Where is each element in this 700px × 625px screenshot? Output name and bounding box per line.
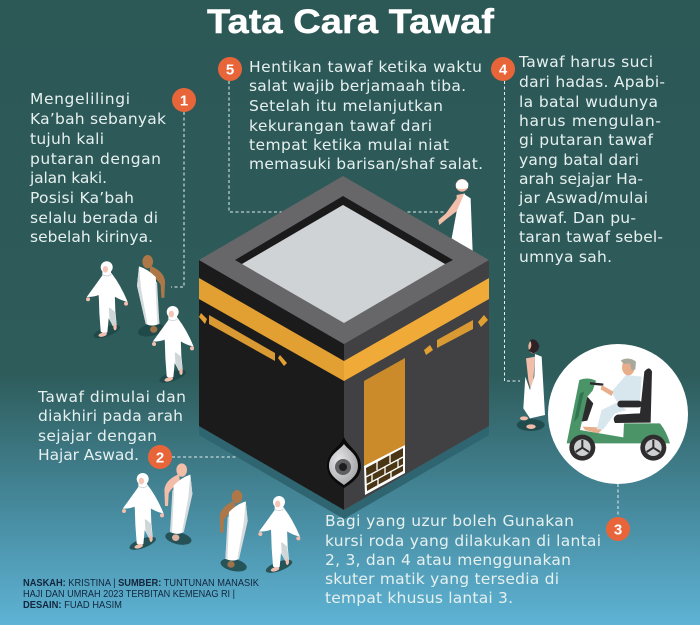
- pilgrim woman lower right: [258, 496, 300, 575]
- text block 4: dari hadas. Apabi-: [519, 73, 665, 91]
- badge 1: [172, 88, 196, 112]
- kiswah strip left: [209, 315, 275, 361]
- text block 4: yang batal dari: [519, 151, 639, 169]
- white circle with mobility scooter: [548, 344, 688, 484]
- text block 4: taran tawaf sebel-: [519, 228, 663, 246]
- text block 3: 2, 3, dan 4 atau menggunakan: [325, 551, 571, 569]
- text block 2: sejajar dengan: [38, 427, 157, 445]
- text block 4: gi putaran tawaf: [519, 131, 654, 149]
- dashed leader 4: [504, 81, 520, 381]
- badge 1: 1: [180, 92, 188, 110]
- text block 2: Tawaf dimulai dan: [37, 388, 186, 406]
- credits: HAJI DAN UMRAH 2023 TERBITAN KEMENAG RI |: [23, 588, 235, 600]
- text block 1: [29, 90, 166, 246]
- dashed leader 3: [617, 484, 619, 517]
- door: [364, 358, 405, 467]
- text block 4: jar Aswad/mulai: [518, 189, 648, 207]
- ground shadow: [199, 426, 489, 519]
- text block 4: [518, 53, 665, 266]
- text block 1: Mengelilingi: [30, 90, 130, 108]
- kiswah ornament right b: [424, 345, 433, 355]
- badge 3: 3: [614, 522, 622, 538]
- badge 2: [148, 445, 172, 469]
- text block 4: umnya sah.: [519, 248, 612, 266]
- text block 1: putaran dengan: [30, 150, 161, 168]
- credits: NASKAH: KRISTINA | SUMBER: TUNTUNAN MANASIK: [23, 577, 259, 589]
- text block 5: [249, 58, 483, 173]
- title: Tata Cara Tawaf: [207, 3, 495, 41]
- pilgrim woman near wall: [152, 306, 194, 385]
- badge 5: [218, 57, 242, 81]
- text block 3: tempat khusus lantai 3.: [325, 589, 513, 607]
- badge 4: 4: [499, 62, 508, 78]
- text block 2: Hajar Aswad.: [38, 446, 139, 464]
- credits: [23, 577, 259, 611]
- text block 2: diakhiri pada arah: [38, 407, 183, 425]
- roof frame: [199, 176, 489, 344]
- text block 1: Ka’bah sebanyak: [30, 110, 166, 128]
- Kaaba: [199, 176, 489, 519]
- credits: DESAIN: FUAD HASIM: [23, 599, 122, 611]
- pilgrim man upper: [137, 255, 165, 339]
- text block 5: Setelah itu melanjutkan: [249, 97, 443, 115]
- text block 1: selalu berada di: [30, 209, 158, 227]
- text block 4: arah sejajar Ha-: [519, 170, 643, 188]
- dashed leader 1: [171, 112, 184, 287]
- text block 3: [325, 512, 601, 607]
- text block 2: [37, 388, 186, 464]
- text block 1: tujuh kali: [30, 130, 104, 148]
- text block 3: kursi roda yang dilakukan di lantai: [325, 532, 601, 550]
- left wall: [199, 260, 344, 510]
- text block 4: la batal wudunya: [519, 93, 658, 111]
- text block 3: skuter matik yang tersedia di: [325, 570, 559, 588]
- badge 2: 2: [156, 450, 164, 466]
- kiswah strip right: [437, 320, 473, 348]
- text block 5: memasuki barisan/shaf salat.: [249, 155, 483, 173]
- text block 5: tempat ketika mulai niat: [249, 136, 449, 154]
- roof centre: [242, 205, 445, 323]
- right wall: [344, 260, 489, 510]
- icon: scooter: [567, 359, 670, 461]
- text block 1: Posisi Ka’bah: [30, 189, 134, 207]
- text block 1: sebelah kirinya.: [30, 228, 153, 246]
- pilgrim man brown: [219, 490, 248, 574]
- badge 3: [606, 517, 630, 541]
- pilgrim man standing right: [517, 339, 545, 431]
- pilgrim woman upper left: [86, 261, 128, 341]
- dashed leader 2: [172, 456, 330, 458]
- brick base of door: [364, 445, 405, 495]
- dashed leader 5: [229, 81, 446, 212]
- text block 5: Hentikan tawaf ketika waktu: [249, 58, 482, 76]
- kiswah ornament left a: [199, 313, 207, 324]
- text block 1: jalan kaki.: [29, 169, 107, 187]
- Hajar Aswad: [327, 437, 361, 488]
- text block 4: harus mengulan-: [519, 112, 661, 130]
- text block 4: Tawaf harus suci: [518, 53, 653, 71]
- gold band right: [344, 278, 489, 381]
- man at the roof edge: [438, 179, 473, 252]
- roof inner shadow: [235, 196, 453, 264]
- kiswah ornament right a: [478, 315, 488, 327]
- kiswah ornament left b: [278, 355, 287, 366]
- gold band left: [199, 278, 344, 381]
- badge 4: [491, 57, 515, 81]
- text block 3: Bagi yang uzur boleh Gunakan: [325, 512, 574, 530]
- pilgrim woman lower left: [122, 473, 164, 552]
- badge 5: 5: [226, 62, 234, 78]
- text block 5: salat wajib berjamaah tiba.: [249, 77, 466, 95]
- text block 4: tawaf. Dan pu-: [519, 209, 636, 227]
- text block 5: kekurangan tawaf dari: [249, 117, 432, 135]
- pilgrim man pink: [164, 463, 193, 547]
